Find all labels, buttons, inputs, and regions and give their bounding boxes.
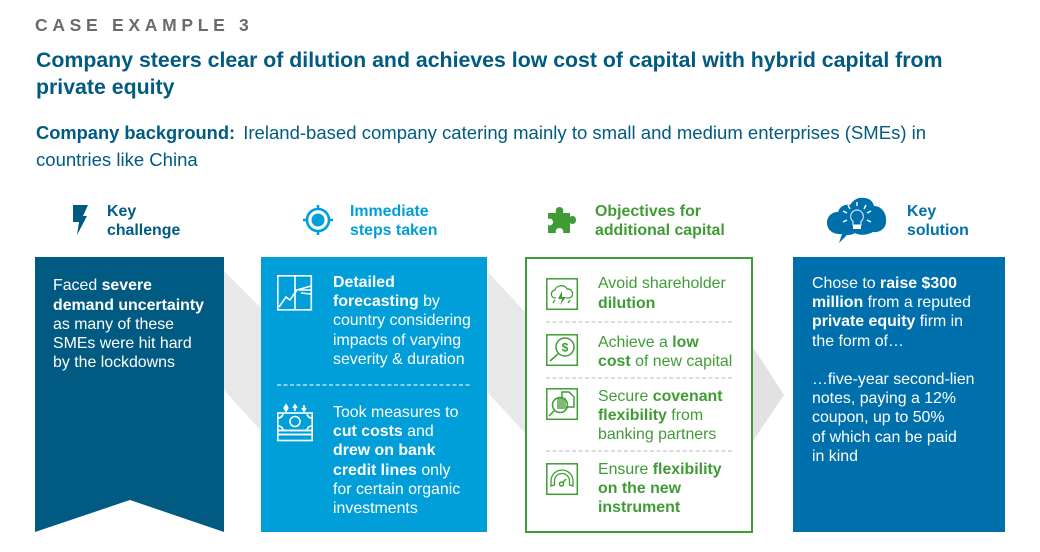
- solution detail text: in kind: [812, 448, 858, 465]
- solution detail text: …five-year second-lien: [812, 371, 975, 388]
- column header: objectives: [548, 203, 725, 239]
- objective 3 text: [598, 388, 723, 443]
- heading: objectives for additional capital: [595, 203, 725, 239]
- objective 2 text: Achieve a low: [598, 334, 699, 351]
- objective 4 text: on the new: [598, 480, 681, 497]
- icon: forecast chart: [277, 275, 312, 311]
- icon: cloud with light bulb: [827, 198, 886, 243]
- heading: immediate steps taken: steps taken: [350, 222, 437, 239]
- challenge text: [53, 277, 204, 371]
- solution text: private equity firm in: [812, 313, 963, 330]
- objective 1 text: Avoid shareholder: [598, 275, 726, 292]
- icon: gauge: [546, 463, 578, 496]
- eyebrow: case example: CASE EXAMPLE 3: [35, 15, 253, 35]
- divider: [546, 321, 732, 323]
- panel: immediate steps: [261, 257, 487, 532]
- heading: key solution: solution: [907, 222, 969, 239]
- title: [36, 48, 943, 99]
- column header: immediate steps: [303, 203, 437, 239]
- solution text: million from a reputed: [812, 294, 971, 311]
- objective 1 text: [598, 275, 726, 312]
- step 2 text: drew on bank: [333, 442, 435, 459]
- solution text: [812, 275, 971, 350]
- icon: magnifier with dollar: [546, 334, 578, 366]
- icon: target: [303, 205, 333, 235]
- heading: immediate steps taken: Immediate: [350, 203, 429, 220]
- icon: money with arrows: [277, 404, 313, 442]
- solution detail text: notes, paying a 12%: [812, 390, 956, 407]
- icon: documents under magnifier: [546, 388, 578, 420]
- heading: key challenge: Key: [107, 203, 136, 220]
- step 1 text: impacts of varying: [333, 332, 461, 349]
- challenge text: demand uncertainty: [53, 297, 204, 314]
- step 2 text: for certain organic: [333, 481, 460, 498]
- objective 2 text: [598, 334, 732, 370]
- challenge text: as many of these: [53, 316, 174, 333]
- objective 4 text: instrument: [598, 499, 680, 516]
- heading: key challenge: challenge: [107, 222, 180, 239]
- heading: key solution: Key: [907, 203, 936, 220]
- divider: [277, 384, 470, 386]
- step 2 text: [333, 404, 460, 517]
- panel: key solution: [793, 257, 1005, 532]
- company background text: countries like China: [36, 148, 198, 170]
- column header: key challenge: [73, 203, 180, 239]
- icon: lightning bolt: [73, 205, 88, 235]
- solution text: the form of…: [812, 333, 904, 350]
- challenge text: Faced severe: [53, 277, 152, 294]
- icon: puzzle piece: [548, 207, 576, 233]
- ribbon shape: [35, 257, 224, 532]
- objective 3 text: Secure covenant: [598, 388, 723, 405]
- heading: immediate steps taken: [350, 203, 437, 239]
- company background text: [36, 122, 926, 170]
- panel: objectives: [525, 257, 753, 533]
- heading: key challenge: [107, 203, 180, 239]
- objective 3 text: flexibility from: [598, 407, 703, 424]
- icon: storm cloud: [546, 278, 578, 310]
- divider: [546, 450, 732, 452]
- challenge text: by the lockdowns: [53, 354, 175, 371]
- heading: objectives for additional capital: additional capital: [595, 222, 725, 239]
- objective 4 text: [598, 461, 722, 516]
- solution detail text: coupon, up to 50%: [812, 409, 945, 426]
- step 2 text: credit lines only: [333, 462, 450, 479]
- panel: key challenge: [35, 257, 224, 532]
- column header: key solution: [827, 198, 969, 243]
- step 2 text: Took measures to: [333, 404, 458, 421]
- objective 2 text: cost of new capital: [598, 353, 732, 370]
- solution detail text: [812, 371, 975, 465]
- divider: [546, 377, 732, 379]
- step 1 text: [333, 274, 471, 368]
- title: private equity: [36, 75, 174, 99]
- icon: magnifier with dollar: $: [562, 340, 569, 354]
- step 1 text: severity & duration: [333, 351, 465, 368]
- objective 1 text: dilution: [598, 295, 655, 312]
- step 2 text: cut costs and: [333, 423, 434, 440]
- challenge text: SMEs were hit hard: [53, 335, 192, 352]
- step 1 text: Detailed: [333, 274, 395, 291]
- heading: key solution: [907, 203, 969, 239]
- heading: objectives for additional capital: Objectives for: [595, 203, 701, 220]
- step 1 text: country considering: [333, 312, 471, 329]
- objective 4 text: Ensure flexibility: [598, 461, 722, 478]
- solution text: Chose to raise $300: [812, 275, 957, 292]
- step 1 text: forecasting by: [333, 293, 440, 310]
- objective 3 text: banking partners: [598, 426, 716, 443]
- step 2 text: investments: [333, 500, 418, 517]
- solution detail text: of which can be paid: [812, 429, 957, 446]
- title: Company steers clear of dilution and achieves low cost of capital with hybrid capital from: [36, 48, 943, 72]
- company background text: Company background: Ireland-based company catering mainly to small and medium enterprises (SMEs) in: [36, 122, 926, 143]
